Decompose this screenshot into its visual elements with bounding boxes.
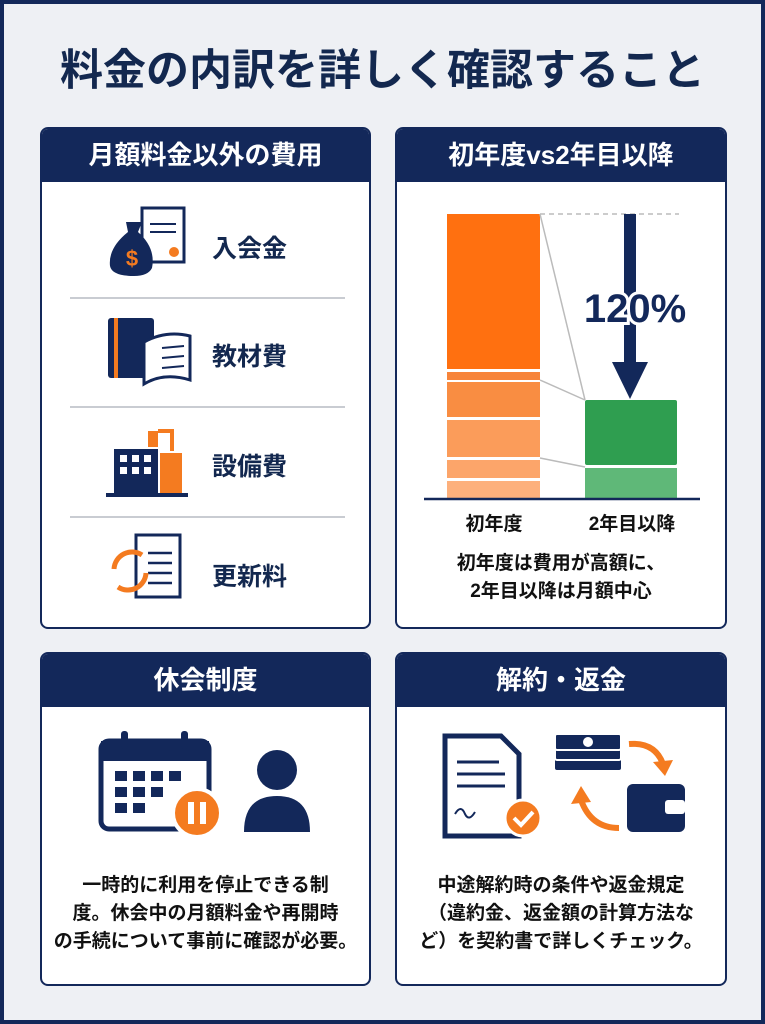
caption: 2年目以降は月額中心 [470,581,652,602]
icon: building [106,429,188,497]
text: cancellation description: 中途解約時の条件や返金規定 [437,875,684,896]
label: entrance fee: 入会金 [212,235,287,263]
text: suspension description: 度。休会中の月額料金や再開時 [72,903,338,924]
text: suspension description: 一時的に利用を停止できる制 [82,875,329,896]
icon: calendar with pause [98,731,219,835]
icon: contract [442,734,540,838]
heading: cancellation [397,654,725,707]
icon: money bag [110,206,186,276]
label: textbook fee: 教材費 [212,343,287,371]
panel: first year vs later [395,127,727,629]
icon: book [108,318,192,387]
axis labels: 2年目以降 [589,514,675,535]
panel: suspension system [40,652,371,986]
text: suspension description [54,874,357,952]
panel: cancellation / refund [395,652,727,986]
icon: renewal document [112,534,182,598]
icon: money bag: $ [126,246,138,271]
caption [457,552,665,602]
icon: money and wallet with arrows [555,735,685,832]
text: cancellation description [419,874,703,952]
text: cancellation description: ど）を契約書で詳しくチェック。 [419,931,703,952]
text: cancellation description: （違約金、返金額の計算方法な [428,903,694,924]
label: 120%: 120% [584,287,686,331]
axis labels [465,514,675,535]
heading: suspension: 休会制度 [153,665,258,695]
bar chart [424,213,700,500]
heading: first year vs later [397,129,725,182]
axis labels: 初年度 [465,514,522,535]
panel: other fees [40,127,371,629]
heading: other fees: 月額料金以外の費用 [88,140,322,170]
arrow [612,214,648,399]
heading: suspension [42,654,369,707]
heading: other fees [42,129,369,182]
label: renewal fee: 更新料 [212,563,287,591]
heading: first year vs later: 初年度vs2年目以降 [448,140,674,170]
text: suspension description: の手続について事前に確認が必要。 [54,931,357,952]
heading: cancellation: 解約・返金 [496,665,626,695]
icon: person [244,750,310,832]
caption: 初年度は費用が高額に、 [457,553,665,574]
label: facility fee: 設備費 [212,453,287,481]
title: 料金の内訳を詳しく確認すること [60,47,705,95]
